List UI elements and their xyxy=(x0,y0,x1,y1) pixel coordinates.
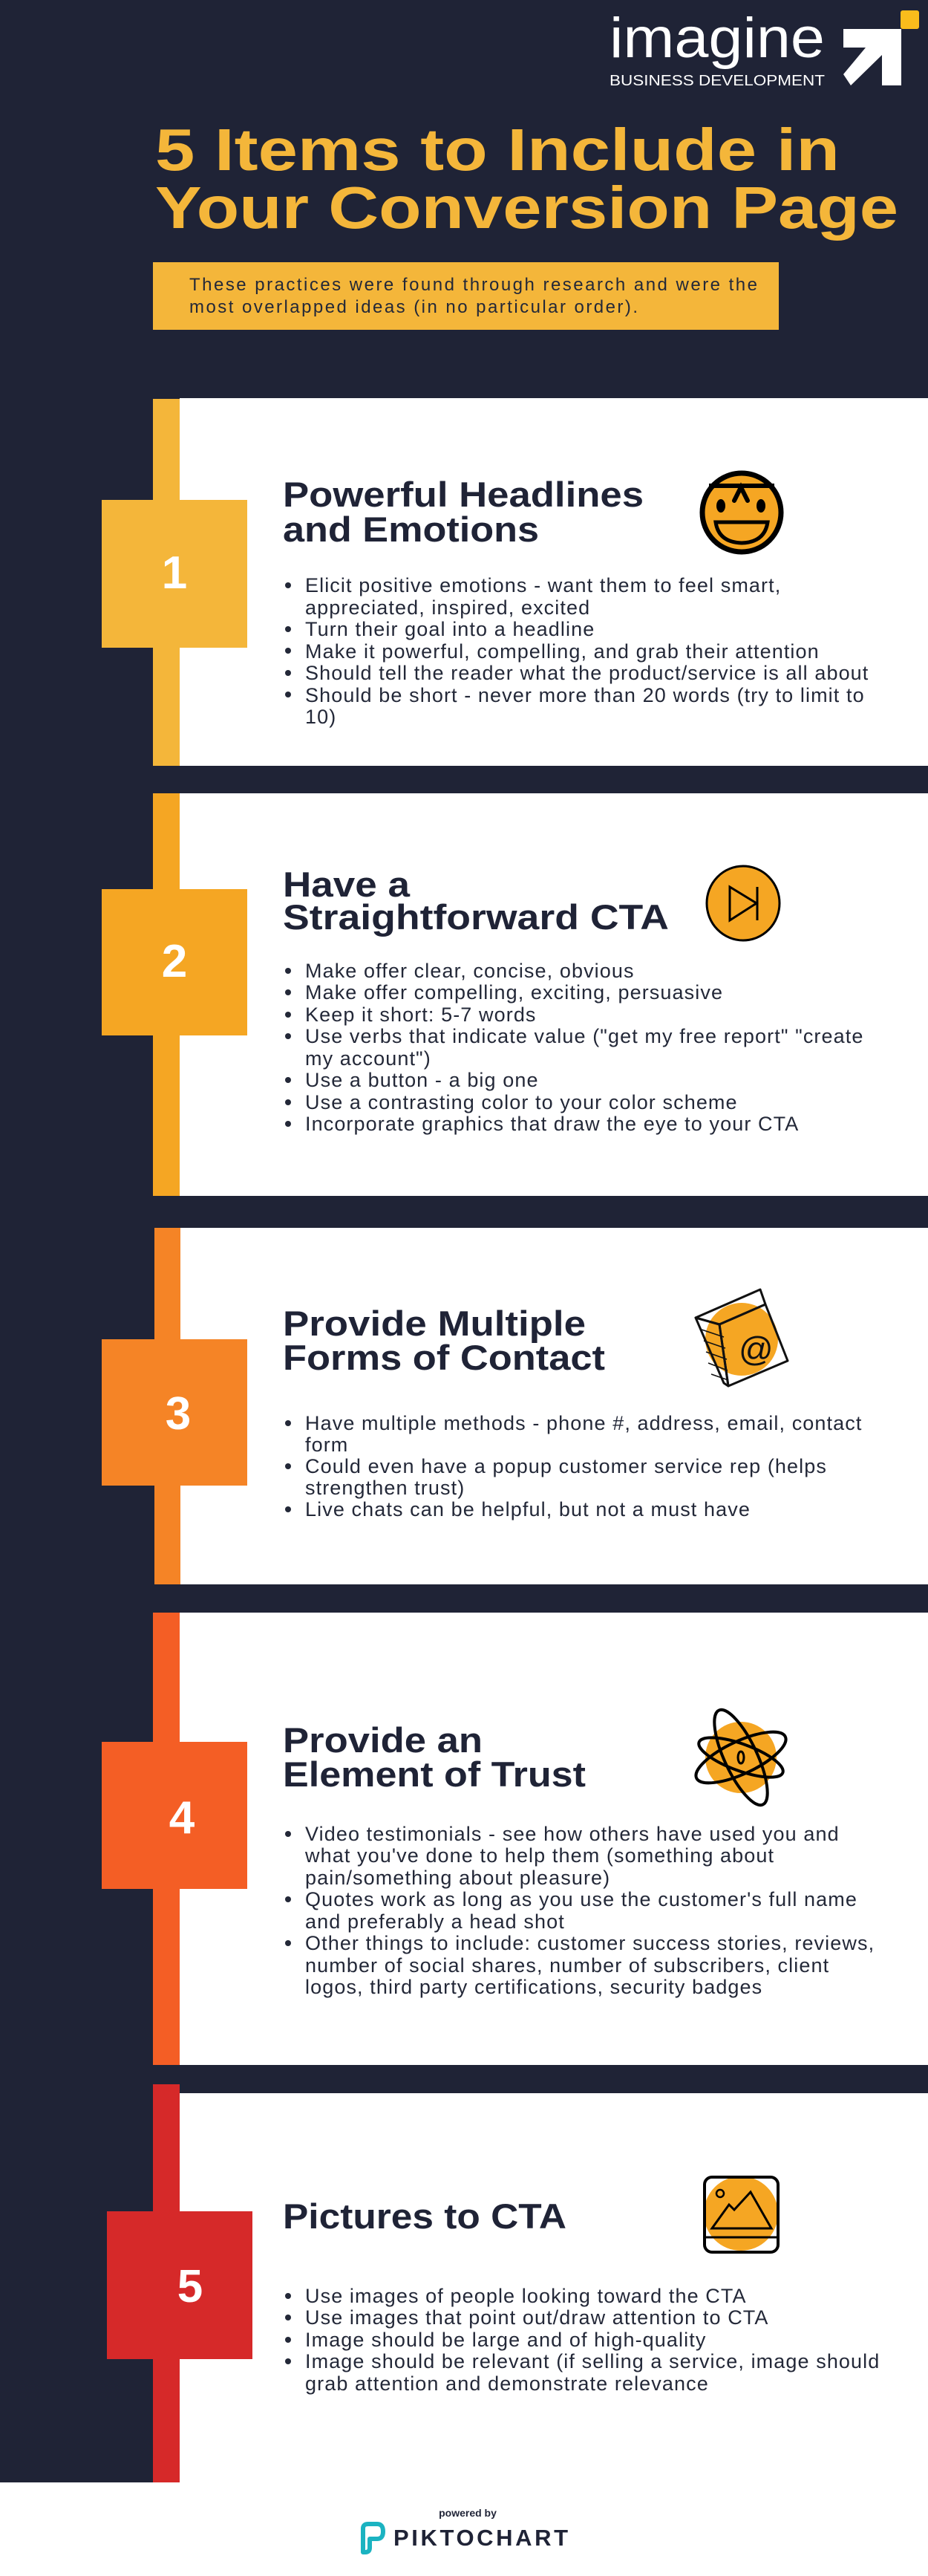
bullets 2 xyxy=(285,960,863,1135)
panel 3: multiple forms of contact xyxy=(102,1228,928,1584)
logo: imagine business development: imagine xyxy=(610,7,825,70)
heading 3: Forms of Contact xyxy=(283,1338,605,1377)
icon: image frame xyxy=(704,2176,778,2252)
number box 2: 2 xyxy=(162,936,187,987)
bullets 2: Keep it short: 5-7 words xyxy=(305,1004,537,1026)
bullets 4: pain/something about pleasure) xyxy=(305,1867,610,1889)
bullets 2: Make offer clear, concise, obvious xyxy=(305,960,635,982)
bullets 4: and preferably a head shot xyxy=(305,1910,565,1933)
bullets 3: Could even have a popup customer service rep (helps xyxy=(305,1455,827,1477)
icon: contact book xyxy=(696,1289,788,1386)
bullets 1 xyxy=(285,574,869,728)
number box 4: 4 xyxy=(169,1792,195,1844)
icon: smiley xyxy=(702,473,781,552)
heading 4: Provide an xyxy=(283,1720,483,1760)
bullets 1: Elicit positive emotions - want them to feel smart, xyxy=(305,574,781,596)
number box 5: 5 xyxy=(177,2261,203,2312)
bullets 3: form xyxy=(305,1434,348,1456)
number box 3 xyxy=(102,1339,247,1486)
bullets 4: logos, third party certifications, security badges xyxy=(305,1976,762,1998)
bullets 2: Incorporate graphics that draw the eye to your CTA xyxy=(305,1113,799,1135)
bullets 3: Have multiple methods - phone #, address, email, contact xyxy=(305,1412,862,1434)
bullets 5: Use images that point out/draw attention to CTA xyxy=(305,2306,769,2329)
footer: powered by piktochart xyxy=(0,2482,928,2576)
bullets 4: Video testimonials - see how others have used you and xyxy=(305,1823,840,1845)
logo: imagine business development: BUSINESS DEVELOPMENT xyxy=(610,73,825,89)
footer: powered by piktochart: PIKTOCHART xyxy=(393,2525,568,2551)
bullets 2: Use a button - a big one xyxy=(305,1069,539,1091)
bullets 3: Live chats can be helpful, but not a must have xyxy=(305,1498,751,1520)
bullets 3: strengthen trust) xyxy=(305,1477,465,1499)
icon: contact book: @ xyxy=(739,1330,774,1368)
number box 3: 3 xyxy=(166,1388,191,1440)
bullets 4: what you've done to help them (something about xyxy=(304,1844,774,1867)
number box 2 xyxy=(102,889,247,1035)
bullets 5: Use images of people looking toward the CTA xyxy=(305,2285,747,2307)
bullets 1: Should be short - never more than 20 words (try to limit to xyxy=(305,684,865,706)
bullets 2: my account") xyxy=(305,1047,431,1070)
bullets 4: number of social shares, number of subscribers, client xyxy=(305,1954,829,1977)
bullets 3 xyxy=(285,1412,862,1520)
bullets 2: Use verbs that indicate value ("get my free report" "create xyxy=(305,1025,863,1047)
number box 1 xyxy=(102,500,247,648)
heading 3 xyxy=(283,1304,605,1377)
heading 2 xyxy=(283,865,669,937)
heading 2: Have a xyxy=(283,865,411,904)
heading 4: Element of Trust xyxy=(283,1754,586,1794)
heading 1: Powerful Headlines xyxy=(283,475,644,514)
bullets 1: 10) xyxy=(305,706,336,728)
bullets 1: Turn their goal into a headline xyxy=(305,618,595,640)
bullets 5 xyxy=(285,2285,880,2395)
bullets 1: Make it powerful, compelling, and grab their attention xyxy=(305,640,820,663)
bullets 4: Other things to include: customer success stories, reviews, xyxy=(305,1932,875,1954)
subtitle box xyxy=(153,262,779,330)
number box 5 xyxy=(107,2211,252,2359)
number box 1: 1 xyxy=(162,547,187,599)
icon: play-next button xyxy=(707,866,780,940)
heading 4 xyxy=(283,1720,586,1794)
bullets 4: Quotes work as long as you use the customer's full name xyxy=(305,1888,857,1910)
panel 4: element of trust xyxy=(102,1613,928,2065)
number box 4 xyxy=(102,1742,247,1889)
subtitle box: These practices were found through research and were the xyxy=(189,275,757,295)
icon: atom xyxy=(690,1703,792,1812)
footer: powered by piktochart: powered by xyxy=(439,2507,497,2519)
bullets 2: Make offer compelling, exciting, persuasive xyxy=(305,981,723,1004)
heading 1 xyxy=(283,475,644,549)
heading 5: Pictures to CTA xyxy=(283,2196,566,2236)
bullets 1: appreciated, inspired, excited xyxy=(305,596,590,619)
subtitle box: most overlapped ideas (in no particular order). xyxy=(189,297,638,317)
heading 1: and Emotions xyxy=(283,510,539,549)
bullets 5: grab attention and demonstrate relevance xyxy=(305,2372,709,2395)
bullets 2: Use a contrasting color to your color scheme xyxy=(305,1091,738,1113)
title: 5 Items to Include in xyxy=(155,117,840,183)
heading 3: Provide Multiple xyxy=(283,1304,586,1343)
panel 2: straightforward CTA xyxy=(102,793,928,1196)
panel 1: powerful headlines xyxy=(102,398,928,766)
bullets 1: Should tell the reader what the product/service is all about xyxy=(305,662,869,684)
bullets 5: Image should be large and of high-quality xyxy=(305,2329,706,2351)
panel 5: pictures to CTA xyxy=(107,2084,928,2482)
title xyxy=(155,117,898,241)
heading 2: Straightforward CTA xyxy=(283,897,669,937)
title: Your Conversion Page xyxy=(155,175,898,241)
bullets 5: Image should be relevant (if selling a service, image should xyxy=(305,2350,880,2372)
bullets 4 xyxy=(285,1823,875,1998)
logo: imagine business development xyxy=(610,7,919,89)
